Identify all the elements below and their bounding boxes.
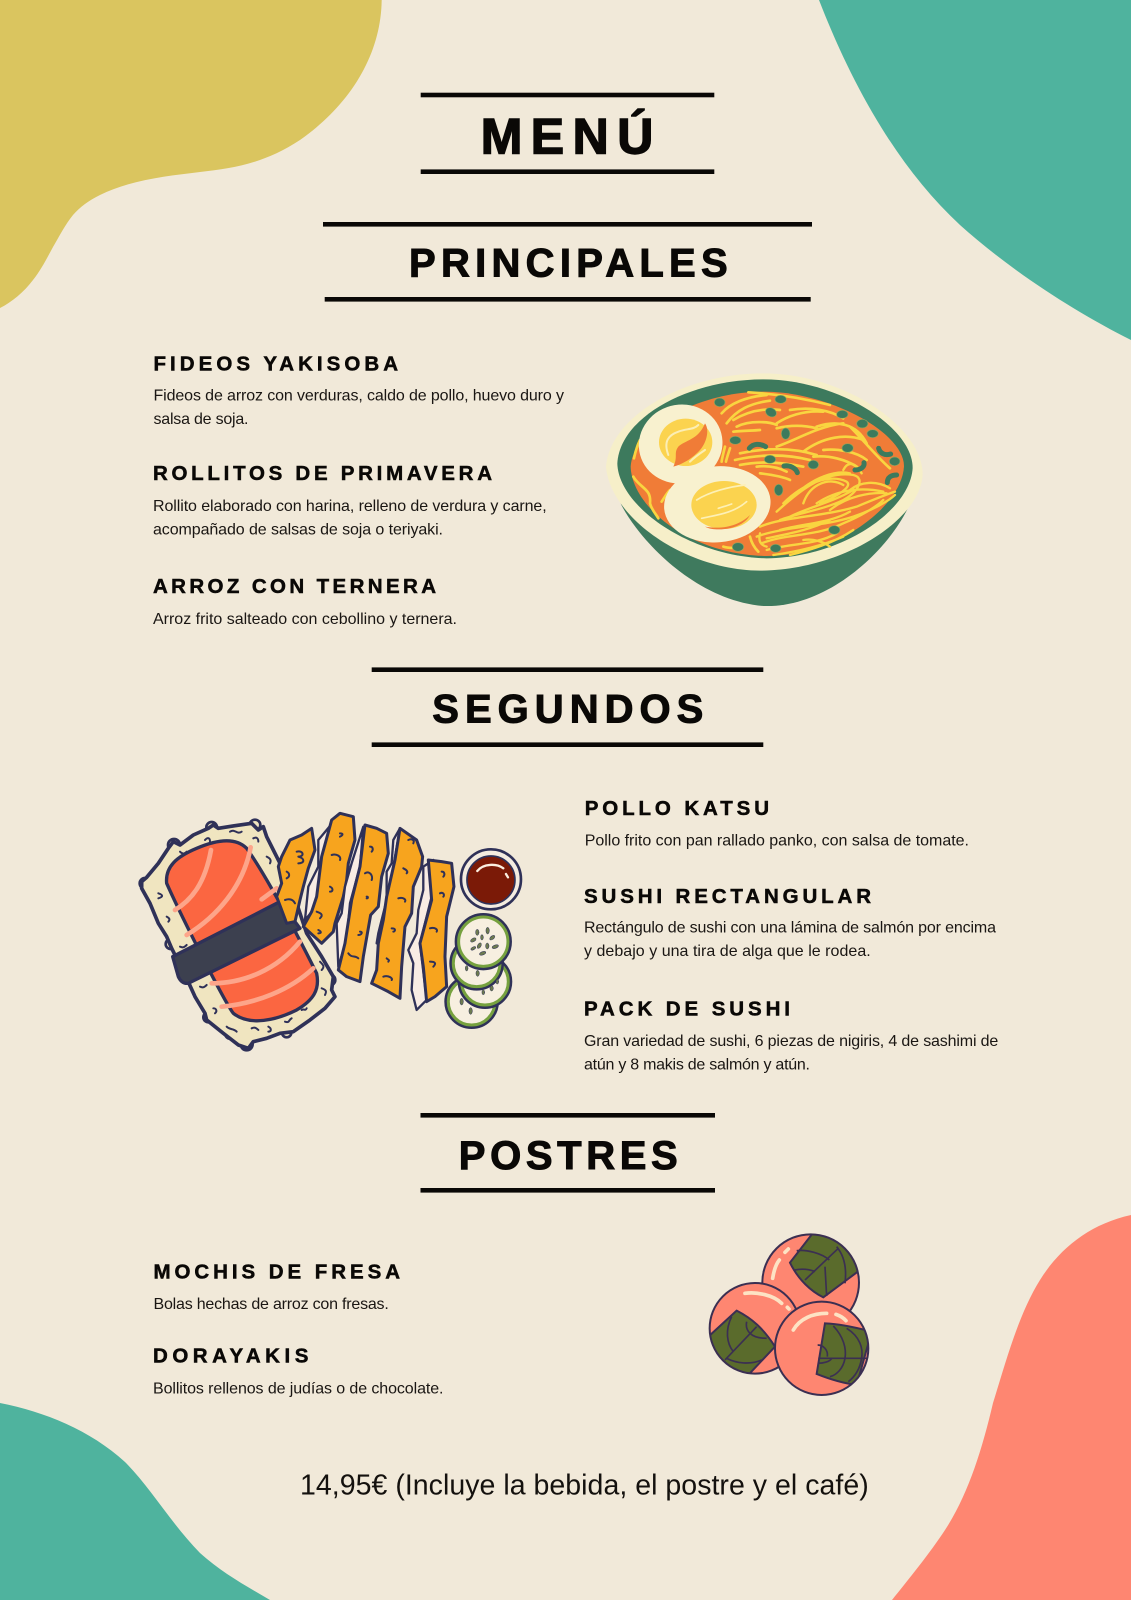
menu item: Arroz con ternera: ARROZ CON TERNERA (153, 575, 436, 598)
menu item: Pack de sushi: atún y 8 makis de salmón y atún. (584, 1056, 810, 1073)
menu item: Sushi rectangular: y debajo y una tira de alga que le rodea. (584, 943, 871, 960)
illustration: strawberry mochis (708, 1232, 872, 1395)
menu item: Sushi rectangular: Rectángulo de sushi con una lámina de salmón por encima (584, 920, 996, 937)
menu item: Arroz con ternera (153, 575, 457, 628)
heading: Principales (323, 222, 812, 302)
menu item: Pollo Katsu (585, 797, 969, 850)
menu item: Sushi rectangular: SUSHI RECTANGULAR (584, 885, 871, 908)
blob: yellow top left (0, 0, 382, 308)
menu item: Fideos Yakisoba: Fideos de arroz con verduras, caldo de pollo, huevo duro y (154, 388, 564, 405)
menu item: Pollo Katsu: POLLO KATSU (585, 797, 769, 820)
menu item: Fideos Yakisoba (154, 353, 564, 428)
blob: coral bottom right (892, 1215, 1131, 1600)
heading: Segundos (372, 667, 763, 747)
menu item: Rollitos de primavera: ROLLITOS DE PRIMAVERA (153, 462, 492, 485)
menu item: Dorayakis: DORAYAKIS (153, 1344, 308, 1367)
title: Menú (421, 93, 714, 174)
heading: Postres: POSTRES (459, 1134, 678, 1178)
menu item: Arroz con ternera: Arroz frito salteado con cebollino y ternera. (153, 611, 457, 628)
menu item: Rollitos de primavera: Rollito elaborado con harina, relleno de verdura y carne, (153, 498, 547, 515)
blob: teal top right (819, 0, 1131, 340)
menu item: Pack de sushi (584, 997, 998, 1073)
menu item: Mochis de fresa (154, 1260, 400, 1313)
menu item: Rollitos de primavera: acompañado de salsas de soja o teriyaki. (153, 521, 443, 538)
illustration: ramen bowl (606, 373, 923, 606)
price note: 14,95€ (Incluye la bebida, el postre y el café) (300, 1469, 869, 1501)
menu item: Pack de sushi: Gran variedad de sushi, 6 piezas de nigiris, 4 de sashimi de (584, 1033, 998, 1050)
menu item: Sushi rectangular (584, 885, 996, 960)
menu item: Dorayakis (153, 1344, 444, 1397)
menu item: Rollitos de primavera (153, 462, 547, 538)
menu item: Pack de sushi: PACK DE SUSHI (584, 997, 790, 1020)
title: Menú: MENÚ (481, 108, 653, 164)
blob: teal bottom left (0, 1403, 270, 1600)
heading: Postres (420, 1113, 715, 1193)
menu item: Mochis de fresa: Bolas hechas de arroz con fresas. (154, 1296, 389, 1313)
illustration: sushi, katsu, sauce and cucumber (140, 813, 521, 1050)
menu item: Mochis de fresa: MOCHIS DE FRESA (154, 1260, 400, 1283)
heading: Principales: PRINCIPALES (409, 242, 728, 286)
menu item: Fideos Yakisoba: salsa de soja. (154, 411, 248, 428)
menu item: Dorayakis: Bollitos rellenos de judías o de chocolate. (153, 1380, 444, 1397)
heading: Segundos: SEGUNDOS (432, 687, 703, 731)
menu item: Fideos Yakisoba: FIDEOS YAKISOBA (154, 353, 398, 376)
menu item: Pollo Katsu: Pollo frito con pan rallado panko, con salsa de tomate. (585, 833, 969, 850)
